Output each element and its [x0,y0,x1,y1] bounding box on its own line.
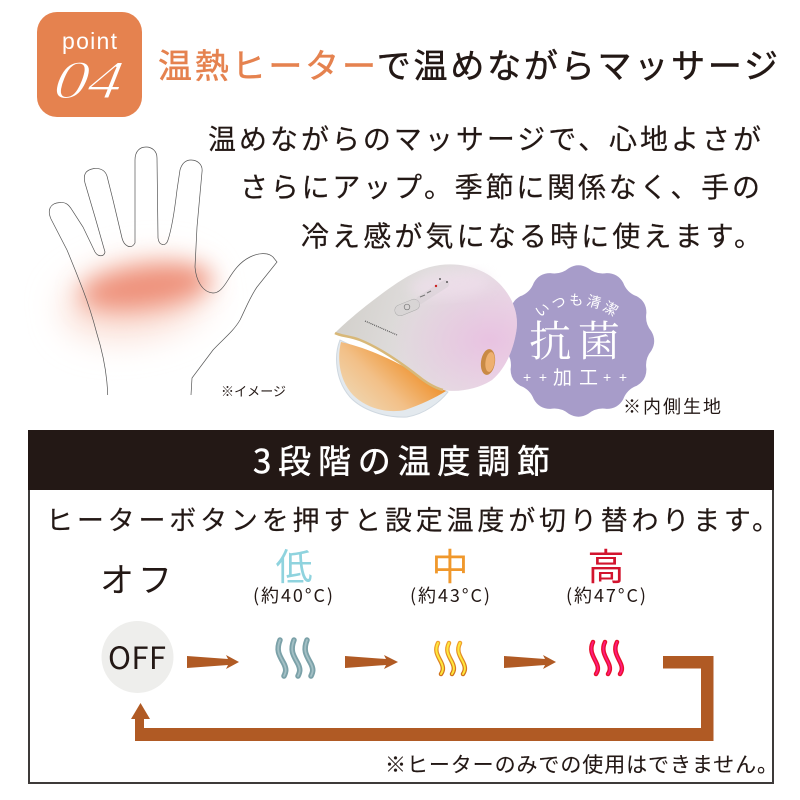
high heat icon [591,642,622,674]
low label [253,547,333,608]
point badge [37,12,142,117]
antibacterial badge [509,265,654,417]
footer note: ※ヒーターのみでの使用はできません。 [385,754,778,777]
low label: (約40°C) [253,582,333,608]
high label [566,547,646,608]
return arrow: high back to off [131,656,714,741]
intro text [208,124,762,252]
high label: 高 [588,547,624,588]
off button: OFF [108,633,166,678]
inner fabric note: ※内側生地 [623,397,721,417]
off button [102,621,174,693]
point badge: 04 [50,51,128,110]
low label: 低 [276,547,312,588]
arrow: low to medium [345,655,398,669]
panel description: ヒーターボタンを押すと設定温度が切り替わります。 [46,506,779,536]
panel heading band: 3段階の温度調節 [253,435,550,483]
medium label [410,547,490,608]
intro text: 冷え感が気になる時に使えます。 [301,221,762,252]
antibacterial badge: 抗菌 [529,320,620,366]
image note: ※イメージ [221,384,286,399]
massager device [335,264,517,417]
medium label: 中 [432,547,468,588]
temperature panel [28,430,774,783]
arrow: off to low [187,655,239,669]
low heat icon [278,640,313,676]
hand illustration with warm glow [49,147,277,395]
intro text: さらにアップ。季節に関係なく、手の [240,172,760,203]
antibacterial badge: 加工 [553,367,598,389]
medium heat icon [436,643,465,674]
antibacterial badge: ++ [603,369,627,385]
high label: (約47°C) [566,582,646,608]
title: 温熱ヒーターで温めながらマッサージ [158,48,778,86]
antibacterial badge: ++ [523,369,547,385]
intro text: 温めながらのマッサージで、心地よさが [208,124,761,155]
antibacterial badge: いつも清潔 [536,294,619,316]
panel heading band [28,430,774,490]
medium label: (約43°C) [410,582,490,608]
point badge: point [62,28,118,54]
arrow: medium to high [504,655,556,669]
off label: オフ [100,562,172,600]
